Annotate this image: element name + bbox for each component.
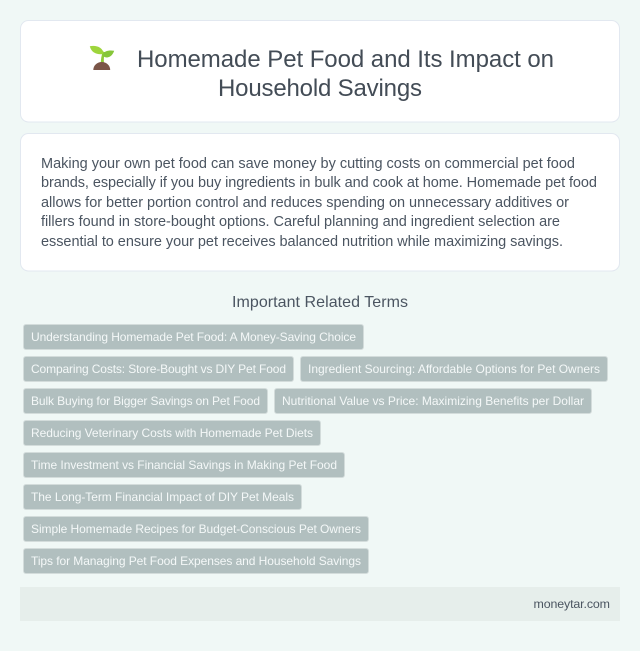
tag 8: The Long-Term Financial Impact of DIY Pet Meals xyxy=(31,490,294,504)
tag 8 xyxy=(24,484,302,510)
footer bar xyxy=(20,587,620,621)
intro line 3: allows for better portion control and reduces spending on unnecessary additives or xyxy=(41,195,569,211)
intro line 4: fillers found in store-bought options. Careful planning and ingredient selection are xyxy=(41,214,560,230)
intro line 5: essential to ensure your pet receives balanced nutrition while maximizing savings. xyxy=(41,234,563,250)
heading: related terms: Important Related Terms xyxy=(232,294,408,311)
tag 4 xyxy=(24,388,268,414)
tag 2: Comparing Costs: Store-Bought vs DIY Pet Food xyxy=(31,362,286,376)
tag 6: Reducing Veterinary Costs with Homemade Pet Diets xyxy=(31,426,313,440)
tag 5 xyxy=(274,388,592,414)
tag 10 xyxy=(24,548,368,574)
title line 1: Homemade Pet Food and Its Impact on xyxy=(137,46,554,73)
footer source: moneytar.com xyxy=(534,597,610,611)
tag 4: Bulk Buying for Bigger Savings on Pet Food xyxy=(31,394,260,408)
tag list xyxy=(24,324,608,574)
tag 7 xyxy=(24,452,344,478)
title line 2: Household Savings xyxy=(218,75,422,102)
tag 5: Nutritional Value vs Price: Maximizing Benefits per Dollar xyxy=(282,394,584,408)
tag 9: Simple Homemade Recipes for Budget-Conscious Pet Owners xyxy=(31,522,361,536)
tag 3 xyxy=(300,356,608,382)
panel: intro text xyxy=(20,134,620,271)
tag 10: Tips for Managing Pet Food Expenses and Household Savings xyxy=(31,554,361,568)
tag 3: Ingredient Sourcing: Affordable Options for Pet Owners xyxy=(308,362,600,376)
tag 7: Time Investment vs Financial Savings in Making Pet Food xyxy=(31,458,337,472)
intro line 2: brands, especially if you buy ingredients in bulk and cook at home. Homemade pet food xyxy=(41,175,597,191)
icon: sprout xyxy=(90,46,114,70)
panel: title card xyxy=(20,20,620,122)
tag 1: Understanding Homemade Pet Food: A Money-Saving Choice xyxy=(31,330,356,344)
tag 9 xyxy=(24,516,368,542)
intro line 1: Making your own pet food can save money by cutting costs on commercial pet food xyxy=(41,156,575,172)
tag 1 xyxy=(24,324,364,350)
tag 2 xyxy=(24,356,294,382)
tag 6 xyxy=(24,420,320,446)
